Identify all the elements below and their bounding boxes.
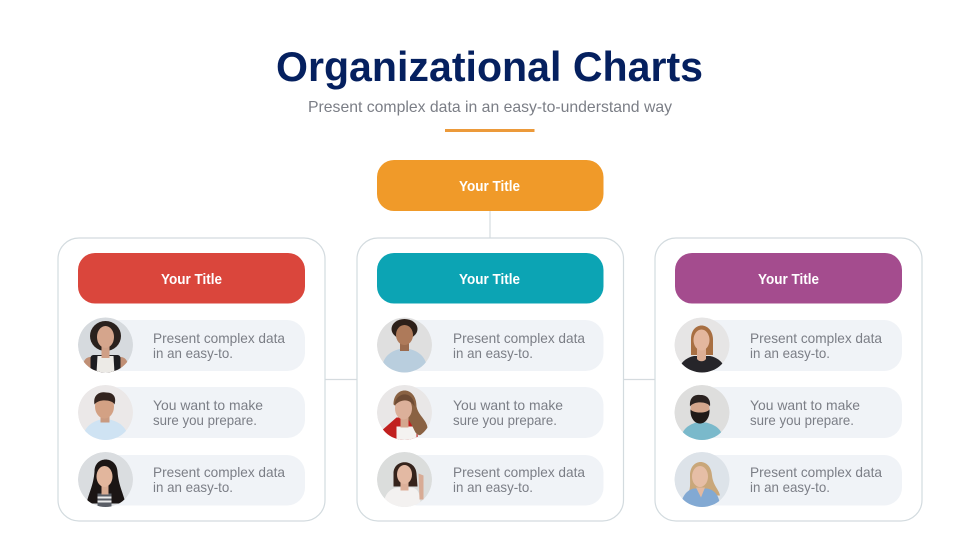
top title box xyxy=(377,160,604,211)
right row 1: Present complex data xyxy=(750,330,882,346)
right row 3: in an easy-to. xyxy=(750,479,830,495)
panel: left xyxy=(58,238,325,521)
top title box: Your Title xyxy=(459,178,520,195)
avatar: bearded man in teal shirt xyxy=(674,385,730,440)
connector: centre panel to right panel xyxy=(623,378,655,380)
avatar: blonde woman in blue shirt xyxy=(674,452,730,508)
centre row 1: in an easy-to. xyxy=(453,345,533,361)
panel: right xyxy=(655,238,922,521)
left row 3: in an easy-to. xyxy=(153,479,233,495)
avatar: man in light blue shirt xyxy=(78,385,133,440)
left panel header: Your Title xyxy=(161,271,222,288)
right row 2 xyxy=(674,385,902,440)
accent underline xyxy=(445,129,534,132)
left row 2: sure you prepare. xyxy=(153,412,257,428)
centre row 2: You want to make xyxy=(453,397,563,413)
centre row 2 xyxy=(377,385,604,440)
avatar: woman in red jacket xyxy=(377,385,432,440)
connector: left panel to centre panel xyxy=(325,378,357,380)
right panel header: Your Title xyxy=(758,271,819,288)
left row 2: You want to make xyxy=(153,397,263,413)
left row 1: in an easy-to. xyxy=(153,345,233,361)
right row 2: You want to make xyxy=(750,397,860,413)
avatar: woman with light brown hair xyxy=(674,318,730,373)
left row 3: Present complex data xyxy=(153,464,285,480)
centre row 3: Present complex data xyxy=(453,464,585,480)
avatar: man with curly hair xyxy=(377,318,432,373)
panel: centre xyxy=(357,238,624,521)
right panel header xyxy=(675,253,902,304)
left panel header xyxy=(78,253,305,304)
right row 2: sure you prepare. xyxy=(750,412,854,428)
left row 2 xyxy=(78,385,305,440)
right row 3: Present complex data xyxy=(750,464,882,480)
centre panel header: Your Title xyxy=(459,271,520,288)
avatar: woman with curly dark hair xyxy=(78,318,133,375)
centre row 2: sure you prepare. xyxy=(453,412,557,428)
centre row 1 xyxy=(377,318,604,373)
right row 3 xyxy=(674,452,902,508)
centre row 3: in an easy-to. xyxy=(453,479,533,495)
right row 1: in an easy-to. xyxy=(750,345,830,361)
title: Organizational Charts xyxy=(276,43,703,90)
centre row 3 xyxy=(377,452,604,508)
avatar: woman touching hair xyxy=(377,452,432,508)
centre row 1: Present complex data xyxy=(453,330,585,346)
left row 3 xyxy=(78,452,305,508)
subtitle: Present complex data in an easy-to-understand way xyxy=(308,99,672,116)
connector: top box to centre panel xyxy=(489,211,491,238)
avatar: woman with long black hair xyxy=(78,452,133,508)
right row 1 xyxy=(674,318,902,373)
centre panel header xyxy=(377,253,604,304)
left row 1 xyxy=(78,318,305,375)
left row 1: Present complex data xyxy=(153,330,285,346)
